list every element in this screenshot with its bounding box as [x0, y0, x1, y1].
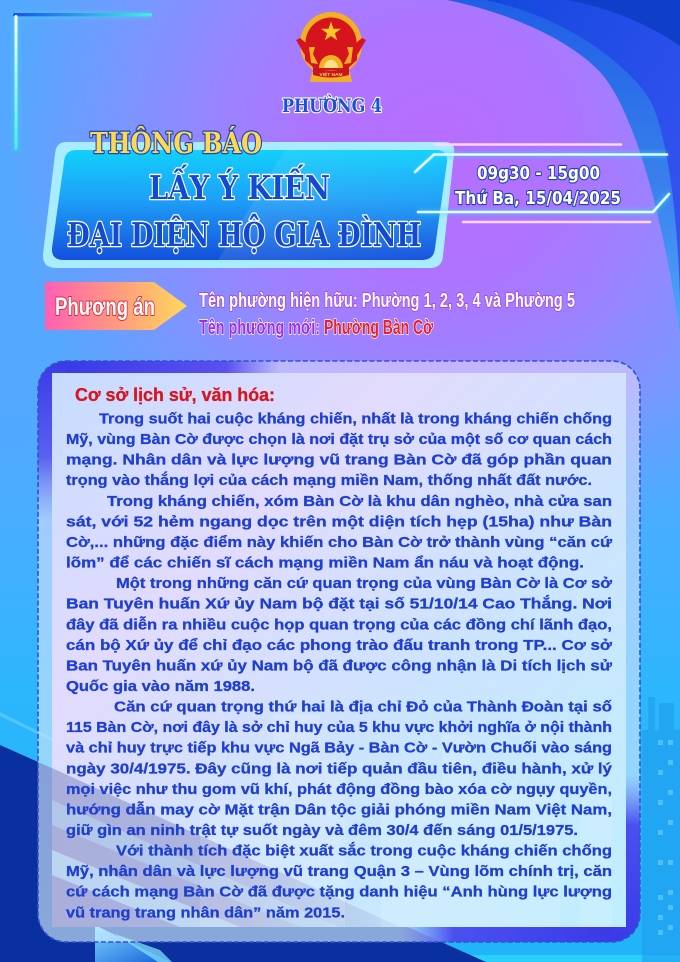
paragraph 3: đây đã diễn ra nhiều cuộc họp quan trọng của các đồng chí lãnh đạo, — [66, 616, 612, 633]
paragraph 4: Căn cứ quan trọng thứ hai là địa chỉ Đỏ của Thành Đoàn tại số — [114, 699, 612, 716]
paragraph 1: Trong suốt hai cuộc kháng chiến, nhất là trong kháng chiến chống — [99, 410, 612, 428]
paragraph 5: Với thành tích đặc biệt xuất sắc trong cuộc kháng chiến chống — [116, 842, 612, 860]
corner frame line — [13, 13, 152, 150]
paragraph 3 — [66, 575, 612, 695]
option arrow label: Phương án — [55, 293, 155, 321]
paragraph 2: lõm” để các chiến sĩ cách mạng miền Nam ẩn náu và hoạt động. — [66, 554, 584, 572]
paragraph 1: mạng. Nhân dân và lực lượng vũ trang Bàn Cờ đã góp phần quan — [66, 452, 612, 469]
paragraph 5: vũ trang trang nhân dân” năm 2015. — [66, 904, 345, 921]
banner — [43, 125, 454, 268]
paragraph 3: Một trong những căn cứ quan trọng của vùng Bàn Cờ là Cơ sở — [116, 575, 612, 592]
paragraph 4: ngày 30/4/1975. Đây cũng là nơi tiếp quản đầu tiên, điều hành, xử lý — [66, 760, 613, 777]
panel heading: Cơ sở lịch sử, văn hóa: — [75, 385, 275, 405]
time and date block — [415, 144, 669, 222]
paragraph 4: mọi việc như thu gom vũ khí, phát động đồng bào xóa cờ ngụy quyền, — [66, 781, 612, 798]
paragraph 3: Ban Tuyên huấn xứ ủy Nam bộ đã được công nhận là Di tích lịch sử — [66, 657, 612, 674]
paragraph 2 — [66, 493, 612, 572]
skyline buildings — [642, 697, 680, 962]
new ward name: Phường Bàn Cờ — [324, 317, 434, 339]
paragraph 5: cứ cách mạng Bàn Cờ đã được tặng danh hiệu “Anh hùng lực lượng — [66, 884, 612, 901]
paragraph 1: Mỹ, vùng Bàn Cờ được chọn là nơi đặt trụ sở của một số cơ quan cách — [66, 431, 612, 448]
paragraph 2: Cờ,... những đặc điểm này khiến cho Bàn Cờ trở thành vùng “căn cứ — [66, 534, 612, 551]
paragraph 4: 115 Bàn Cờ, nơi đây là sở chỉ huy của 5 khu vực khởi nghĩa ở nội thành — [66, 719, 612, 736]
paragraph 2: Trong kháng chiến, xóm Bàn Cờ là khu dân nghèo, nhà cửa san — [107, 493, 612, 510]
paragraph 1 — [66, 410, 612, 489]
paragraph 3: Ban Tuyên huấn Xứ ủy Nam bộ đặt tại số 51/10/14 Cao Thắng. Nơi — [66, 595, 612, 613]
date: Thứ Ba, 15/04/2025 — [455, 188, 621, 209]
paragraph 4 — [66, 699, 613, 839]
panel: history and culture — [38, 361, 640, 942]
heading: consultation: LẤY Ý KIẾN — [149, 163, 330, 207]
ward name: PHƯỜNG 4 — [282, 94, 382, 117]
paragraph 5 — [66, 842, 612, 921]
icon: national emblem: VIỆT NAM — [320, 70, 342, 78]
heading: household representatives: ĐẠI DIỆN HỘ GIA ĐÌNH — [67, 212, 421, 254]
option arrow label — [45, 282, 187, 330]
icon: national emblem — [296, 12, 366, 82]
heading: notice: THÔNG BÁO — [90, 125, 262, 160]
paragraph 4: giữ gìn an ninh trật tự suốt ngày và đêm 30/4 đến sáng 01/5/1975. — [66, 822, 578, 839]
paragraph 3: Quốc gia vào năm 1988. — [66, 678, 255, 695]
paragraph 4: hướng dẫn may cờ Mặt trận Dân tộc giải phóng miền Nam Việt Nam, — [66, 801, 612, 818]
paragraph 4: và chỉ huy trực tiếp khu vực Ngã Bảy - Bàn Cờ - Vườn Chuối vào sáng — [66, 740, 612, 757]
paragraph 1: trọng vào thắng lợi của cách mạng miền Nam, thống nhất đất nước. — [66, 471, 592, 489]
time: 09g30 - 15g00 — [477, 163, 600, 184]
paragraph 3: cán bộ Xứ ủy để chỉ đạo các phong trào đấu tranh trong TP... Cơ sở — [66, 637, 612, 654]
paragraph 2: sát, với 52 hẻm ngang dọc trên một diện tích hẹp (15ha) như Bàn — [66, 513, 612, 530]
new ward name: Tên phường mới: — [199, 317, 320, 339]
paragraph 5: Mỹ, nhân dân và lực lượng vũ trang Quận 3 – Vùng lõm chính trị, căn — [66, 863, 612, 880]
